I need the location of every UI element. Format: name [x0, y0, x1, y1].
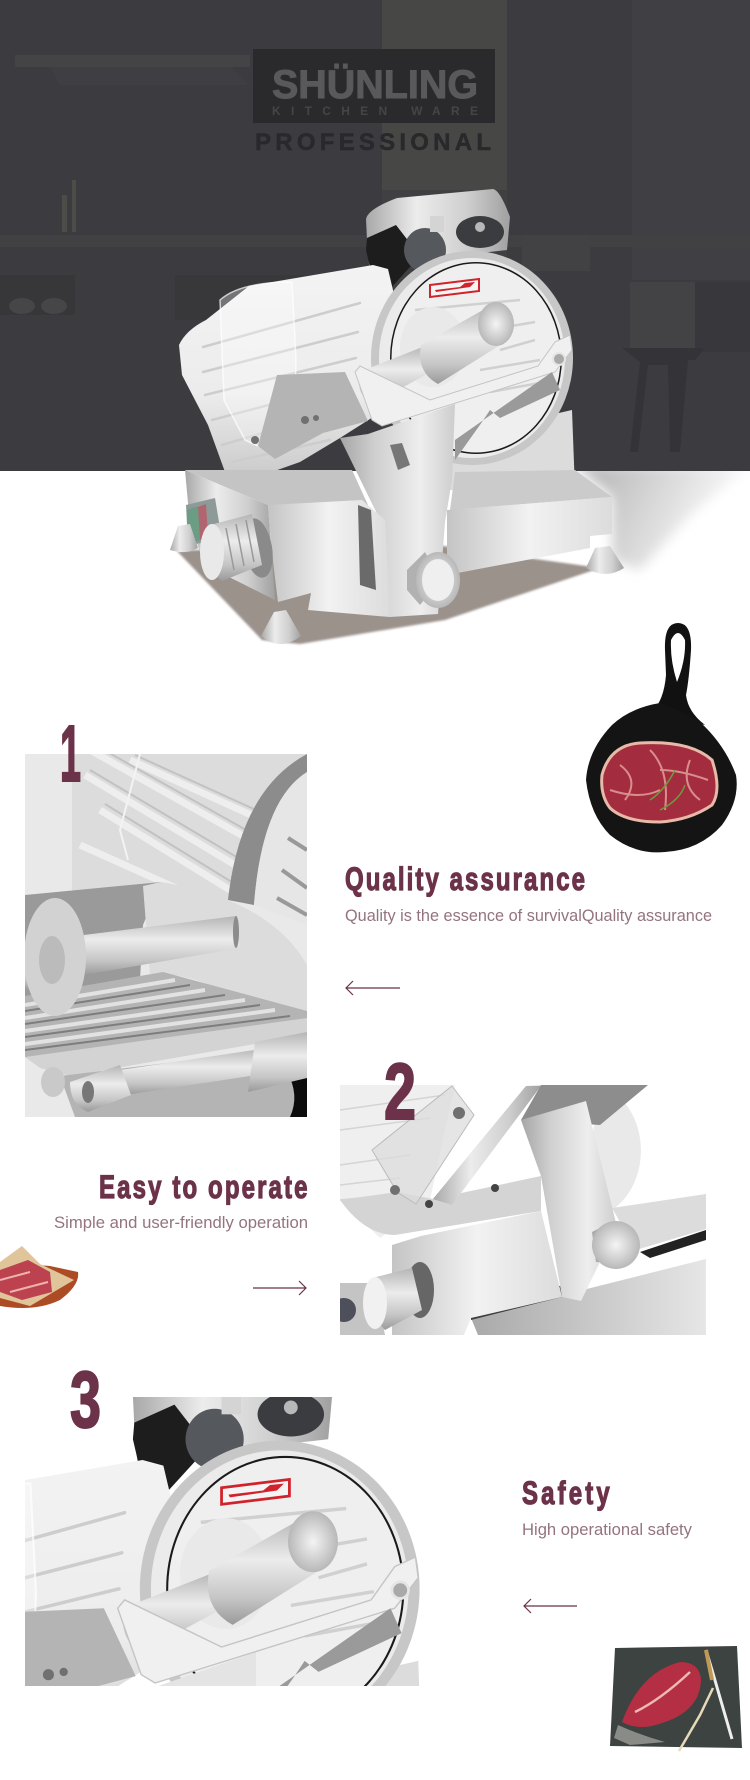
photo 3: blade and handle close-up [25, 1397, 420, 1686]
arrow: right [253, 1281, 306, 1295]
text: 1 [60, 709, 81, 798]
logo: Shunling Kitchen Ware: KITCHEN WARE [272, 104, 478, 118]
text block: quality assurance [345, 861, 712, 925]
heading: quality assurance: Quality assurance [345, 861, 585, 897]
logo: Shunling Kitchen Ware: SHÜNLING [272, 62, 478, 107]
heading: easy to operate: Easy to operate [99, 1169, 308, 1205]
photo 1: carriage close-up [24, 745, 307, 1117]
description: quality assurance: Quality is the essence of survivalQuality assurance [345, 907, 712, 925]
icon: steak in cast iron pan [586, 623, 737, 852]
number 2: 2 [384, 1047, 416, 1136]
number 3: 3 [70, 1355, 101, 1444]
description: safety: High operational safety [522, 1521, 693, 1539]
text block: easy to operate [54, 1169, 308, 1232]
heading: safety: Safety [522, 1475, 610, 1511]
arrow: left [524, 1599, 577, 1613]
machine shadows [177, 465, 750, 644]
arrow: left [346, 981, 400, 995]
icon: steak on slate with cutlery [610, 1646, 742, 1751]
product: meat slicer [170, 189, 624, 644]
photo 2: pillar and dial close-up [332, 1085, 706, 1335]
text block: safety [522, 1475, 693, 1539]
description: easy to operate: Simple and user-friendly operation [54, 1214, 308, 1232]
logo: Shunling Kitchen Ware [253, 49, 495, 123]
icon: steak on wooden plate [0, 1246, 78, 1308]
brand line: Professional: PROFESSIONAL [255, 129, 491, 156]
header dark kitchen background [0, 0, 750, 471]
